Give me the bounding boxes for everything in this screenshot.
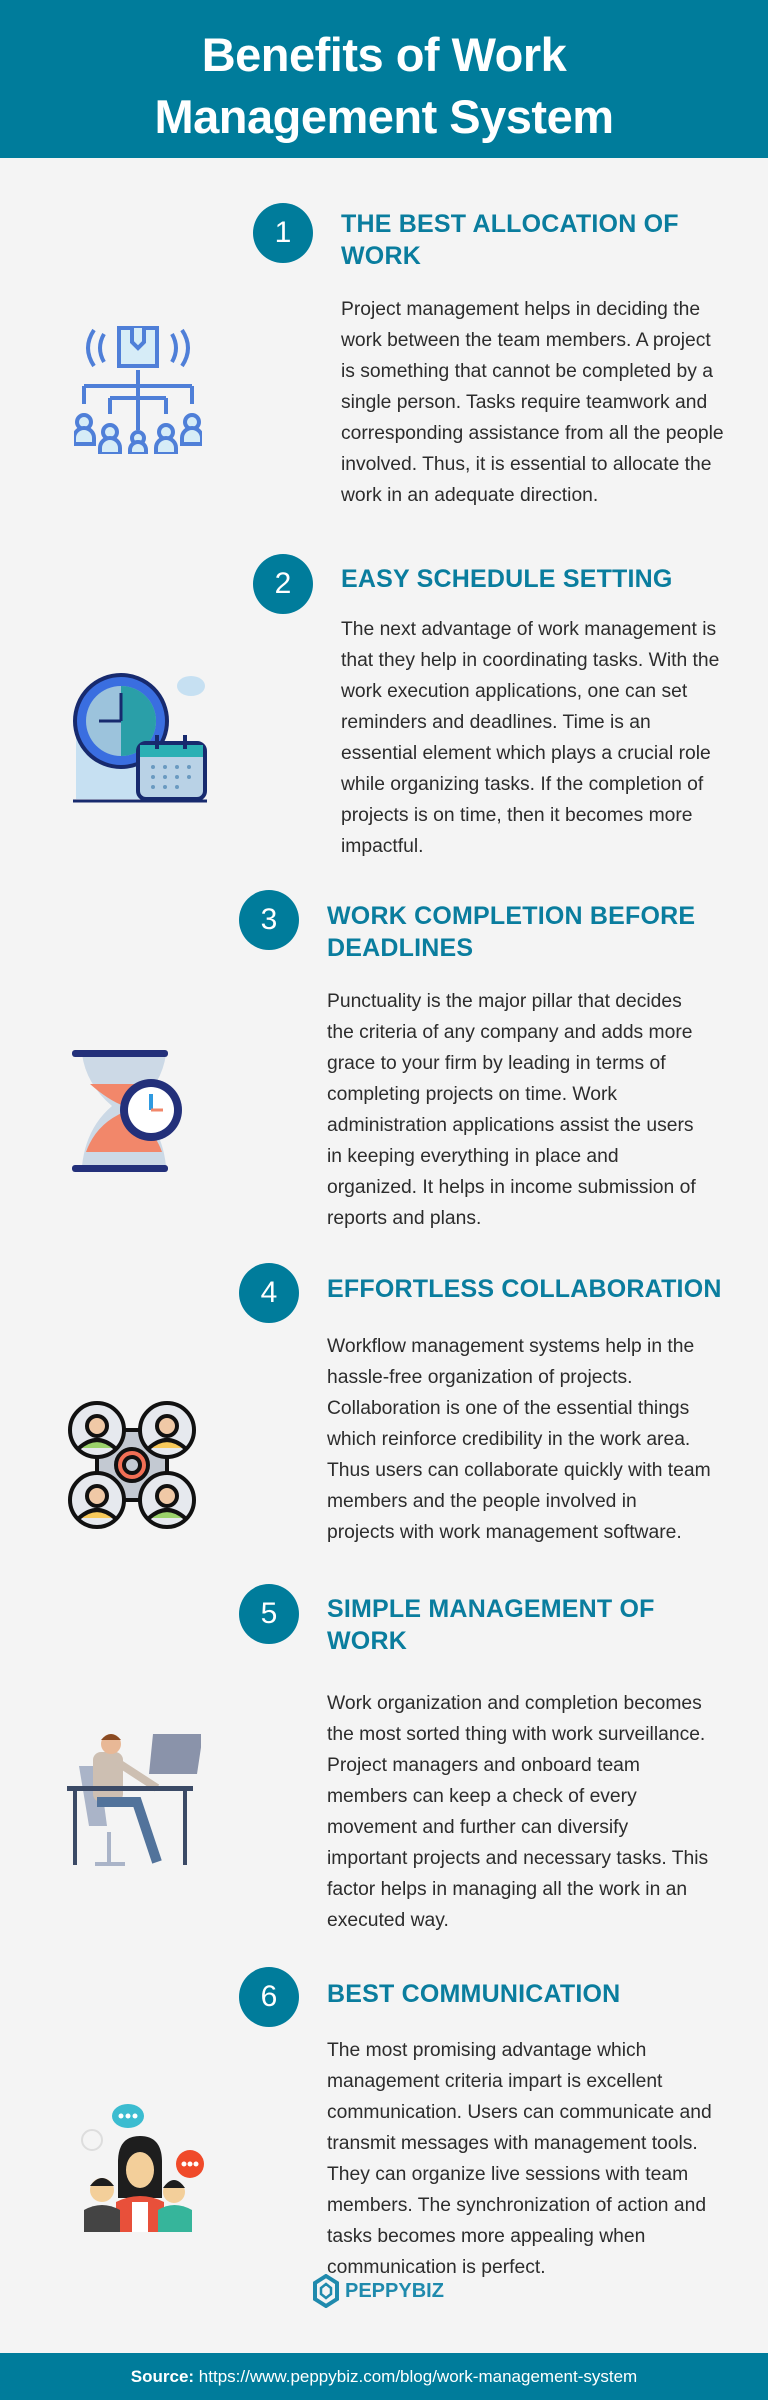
body 5: factor helps in managing all the work in an [327, 1879, 687, 1900]
number badge 6: 6 [261, 1980, 277, 2013]
body 5: members can keep a check of every [327, 1786, 637, 1807]
body 2: reminders and deadlines. Time is an [341, 712, 651, 733]
title: Benefits of Work [202, 28, 566, 81]
number badge 4 [239, 1263, 299, 1323]
body 1: Project management helps in deciding the [341, 299, 700, 320]
logo: peppybiz: PEPPYBIZ [345, 2280, 444, 2302]
section 6 [81, 1967, 712, 2278]
heading 2: EASY SCHEDULE SETTING [341, 565, 673, 593]
title [0, 0, 768, 158]
heading 1: WORK [341, 242, 421, 270]
body 4: Workflow management systems help in the [327, 1336, 694, 1357]
heading 1 [341, 210, 679, 270]
section 4 [68, 1263, 722, 1543]
body 5 [327, 1693, 708, 1931]
number badge 5 [239, 1584, 299, 1644]
section 3 [72, 890, 696, 1229]
body 6: communication. Users can communicate and [327, 2102, 712, 2123]
body 6: They can organize live sessions with team [327, 2164, 688, 2185]
body 2: The next advantage of work management is [341, 619, 716, 640]
icon: hourglass with clock [72, 1050, 182, 1172]
body 1: work between the team members. A project [341, 330, 711, 351]
body 6 [327, 2040, 712, 2278]
heading 4: EFFORTLESS COLLABORATION [327, 1275, 722, 1303]
number badge 3: 3 [261, 903, 277, 936]
body 3: organized. It helps in income submission of [327, 1177, 696, 1198]
number badge 2: 2 [275, 567, 291, 600]
section 2 [73, 554, 719, 857]
logo: peppybiz [313, 2274, 444, 2308]
title: Management System [154, 90, 614, 143]
body 1: is something that cannot be completed by a [341, 361, 713, 382]
body 5: the most sorted thing with work surveillance. [327, 1724, 705, 1745]
body 3: reports and plans. [327, 1208, 481, 1229]
number badge 1 [253, 203, 313, 263]
body 2: work execution applications, one can set [341, 681, 687, 702]
body 6: tasks becomes more appealing when [327, 2226, 645, 2247]
heading 3 [327, 902, 695, 962]
body 4: projects with work management software. [327, 1522, 682, 1543]
body 5: important projects and necessary tasks. This [327, 1848, 708, 1869]
body 5: movement and further can diversify [327, 1817, 628, 1838]
body 3: the criteria of any company and adds more [327, 1022, 692, 1043]
heading 5: WORK [327, 1627, 407, 1655]
body 4: Thus users can collaborate quickly with team [327, 1460, 711, 1481]
body 1: single person. Tasks require teamwork and [341, 392, 707, 413]
body 3 [327, 991, 696, 1229]
number badge 4: 4 [261, 1276, 277, 1309]
number badge 5: 5 [261, 1597, 277, 1630]
footer: source [0, 2353, 768, 2400]
body 3: in keeping everything in place and [327, 1146, 619, 1167]
body 4: which reinforce credibility in the work area. [327, 1429, 690, 1450]
heading 3: DEADLINES [327, 934, 473, 962]
icon: collaboration [68, 1401, 196, 1529]
heading 5 [327, 1595, 655, 1655]
body 2: projects is on time, then it becomes more [341, 805, 692, 826]
body 1: corresponding assistance from all the people [341, 423, 724, 444]
body 2 [341, 619, 719, 857]
heading 5: SIMPLE MANAGEMENT OF [327, 1595, 655, 1623]
body 6: transmit messages with management tools. [327, 2133, 698, 2154]
body 6: management criteria impart is excellent [327, 2071, 662, 2092]
body 3: administration applications assist the users [327, 1115, 694, 1136]
body 6: communication is perfect. [327, 2257, 546, 2278]
body 4: hassle-free organization of projects. [327, 1367, 632, 1388]
body 5: executed way. [327, 1910, 449, 1931]
number badge 6 [239, 1967, 299, 2027]
section 5 [67, 1584, 708, 1931]
body 1 [341, 299, 724, 506]
heading 3: WORK COMPLETION BEFORE [327, 902, 695, 930]
body 4: members and the people involved in [327, 1491, 637, 1512]
number badge 1: 1 [275, 216, 291, 249]
icon: team communication [81, 2104, 204, 2232]
footer: source: Source: https://www.peppybiz.com/blog/work-management-system [131, 2367, 637, 2386]
body 5: Project managers and onboard team [327, 1755, 640, 1776]
body 4: Collaboration is one of the essential things [327, 1398, 689, 1419]
body 1: involved. Thus, it is essential to allocate the [341, 454, 711, 475]
number badge 2 [253, 554, 313, 614]
heading 1: THE BEST ALLOCATION OF [341, 210, 679, 238]
body 2: impactful. [341, 836, 424, 857]
body 2: essential element which plays a crucial role [341, 743, 711, 764]
body 4 [327, 1336, 711, 1543]
body 6: members. The synchronization of action and [327, 2195, 706, 2216]
icon: person at desk [67, 1734, 201, 1866]
heading 6: BEST COMMUNICATION [327, 1980, 620, 2008]
body 2: that they help in coordinating tasks. With the [341, 650, 719, 671]
section 1 [74, 203, 724, 506]
body 3: Punctuality is the major pillar that decides [327, 991, 682, 1012]
body 5: Work organization and completion becomes [327, 1693, 702, 1714]
body 3: completing projects on time. Work [327, 1084, 617, 1105]
icon: work allocation [74, 326, 202, 454]
body 6: The most promising advantage which [327, 2040, 646, 2061]
number badge 3 [239, 890, 299, 950]
body 1: work in an adequate direction. [341, 485, 598, 506]
icon: clock and calendar [73, 673, 207, 802]
body 3: grace to your firm by leading in terms of [327, 1053, 666, 1074]
body 2: while organizing tasks. If the completion of [341, 774, 703, 795]
